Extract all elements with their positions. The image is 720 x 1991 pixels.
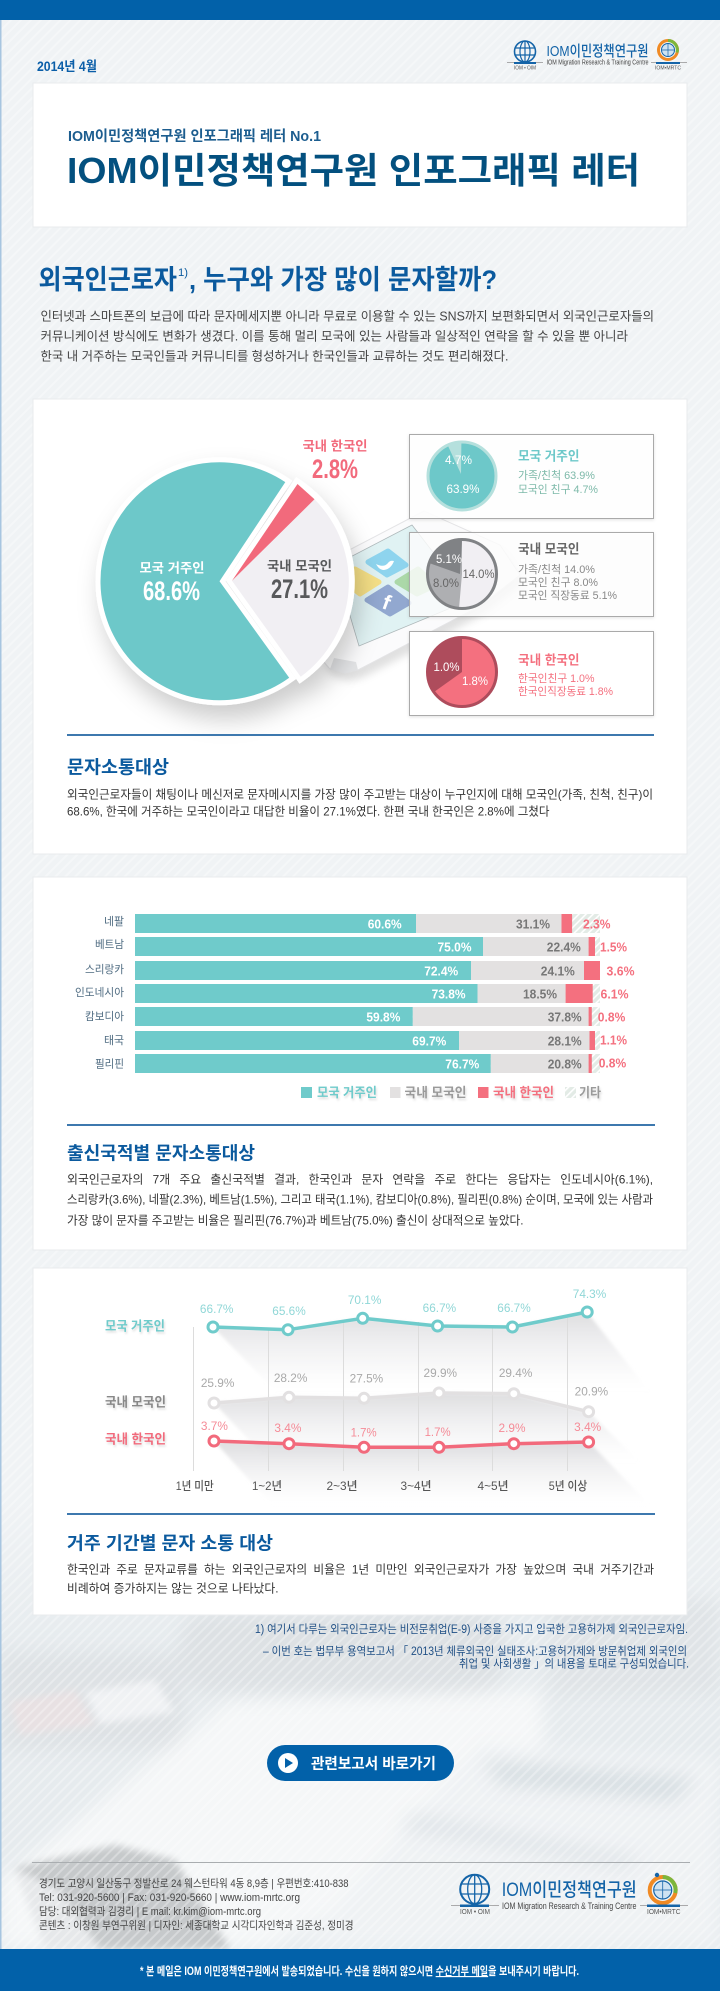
row: Thailand: 69.7% xyxy=(412,1034,446,1048)
series: Koreans: 1.7% xyxy=(351,1428,377,1440)
series: Koreans: 3.4% xyxy=(574,1422,601,1434)
box: compatriots in Korea: 가족/친척 14.0% xyxy=(518,563,595,576)
box: home country residents xyxy=(410,434,654,518)
series: Koreans: 3.7% xyxy=(201,1421,228,1433)
text: by nationality: 외국인근로자의 7개 주요 출신국적별 결과, 한국인과 문자 연락을 주로 한다는 응답자는 인도네시아(6.1%), xyxy=(67,1172,653,1186)
box: Koreans xyxy=(410,632,654,716)
series: compatriots in Korea: 29.4% xyxy=(499,1368,532,1380)
x axis labels: 3~4년 xyxy=(400,1479,432,1493)
series: Koreans xyxy=(201,1421,601,1452)
line chart xyxy=(105,1289,650,1505)
row: Nepal: 2.3% xyxy=(583,917,610,931)
box: home country residents: 가족/친척 63.9% xyxy=(518,469,595,482)
small pie xyxy=(428,638,496,706)
row: Nepal: 네팔 xyxy=(104,915,124,928)
row: Indonesia: 인도네시아 xyxy=(75,986,124,999)
slice: compatriots in Korea xyxy=(232,499,349,677)
row: Nepal: 31.1% xyxy=(516,917,550,931)
contact details: 담당: 대외협력과 김경리 | E mail: kr.kim@iom-mrtc.org xyxy=(39,1905,261,1918)
row: Nepal xyxy=(104,914,610,933)
contact details xyxy=(39,1876,354,1932)
series: home country residents: 66.7% xyxy=(497,1303,531,1315)
series: home country residents: 70.1% xyxy=(348,1295,381,1307)
text: by nationality xyxy=(67,1172,653,1228)
box: home country residents: 모국인 친구 4.7% xyxy=(518,483,598,496)
footer bar: * 본 메일은 IOM 이민정책연구원에서 발송되었습니다. 수신을 원하지 않으시면 수신거부 메일을 보내주시기 바랍니다. xyxy=(140,1964,579,1978)
date: 2014년 4월 xyxy=(37,58,97,74)
pie chart: main: 국내 모국인 xyxy=(267,558,332,574)
row: Sri Lanka: 24.1% xyxy=(541,964,575,978)
row: Indonesia: 18.5% xyxy=(523,987,557,1001)
row: Sri Lanka xyxy=(85,961,634,980)
footnotes: 취업 및 사회생활 」의 내용을 토대로 구성되었습니다. xyxy=(459,1656,689,1670)
text: by length of stay: 한국인과 주로 문자교류를 하는 외국인근로자의 비율은 1년 미만인 외국인근로자가 가장 높았으며 국내 거주기간과 xyxy=(67,1562,654,1576)
heading: main question: , 누구와 가장 많이 문자할까? xyxy=(189,265,497,295)
series labels: 국내 모국인 xyxy=(105,1394,166,1410)
box: home country residents: 모국 거주인 xyxy=(518,448,580,464)
row: Philippines: 76.7% xyxy=(445,1057,479,1071)
box: Koreans: 국내 한국인 xyxy=(518,652,580,668)
small pie: 1.8% xyxy=(462,674,488,688)
logo: IOM footer: IOM Migration Research & Training Centre xyxy=(502,1901,636,1912)
icon: smartphone: f xyxy=(379,591,395,615)
contact details: Tel: 031-920-5600 | Fax: 031-920-5660 | www.iom-mrtc.org xyxy=(39,1892,300,1904)
box: Koreans: 한국인직장동료 1.8% xyxy=(518,685,613,698)
series: home country residents: 66.7% xyxy=(200,1304,233,1316)
legend xyxy=(301,1085,601,1100)
background photo: blurred report and keyboard xyxy=(0,1600,720,1949)
button: related report: 관련보고서 바로가기 xyxy=(311,1756,436,1772)
row: Vietnam: 1.5% xyxy=(600,940,627,954)
series: compatriots in Korea xyxy=(201,1368,608,1417)
logo: IOM header: IOM • OIM xyxy=(514,66,536,72)
small pie xyxy=(428,539,496,609)
series: Koreans: 3.4% xyxy=(274,1423,301,1435)
heading: main question xyxy=(38,265,497,295)
intro text: 커뮤니케이션 방식에도 변화가 생겼다. 이를 통해 멀리 모국에 있는 사람들과 일상적인 연락을 할 수 있을 뿐 아니라 xyxy=(40,330,628,344)
logo: IOM footer: IOM이민정책연구원 xyxy=(502,1879,637,1901)
row: Sri Lanka: 3.6% xyxy=(606,964,634,978)
series: compatriots in Korea: 25.9% xyxy=(201,1378,234,1390)
box: compatriots in Korea: 모국인 친구 8.0% xyxy=(518,576,598,589)
heading: main question: 1) xyxy=(178,267,188,279)
pie chart: main: 2.8% xyxy=(312,454,358,484)
row: Vietnam xyxy=(95,937,627,956)
row: Cambodia: 59.8% xyxy=(366,1010,400,1024)
panel: communication targets xyxy=(33,399,687,854)
intro text: 인터넷과 스마트폰의 보급에 따라 문자메세지뿐 아니라 무료로 이용할 수 있는 SNS까지 보편화되면서 외국인근로자들의 xyxy=(40,310,654,324)
icon: play xyxy=(278,1753,298,1773)
text: communication targets xyxy=(67,788,653,818)
series: compatriots in Korea: 27.5% xyxy=(350,1374,383,1386)
row: Vietnam: 22.4% xyxy=(547,940,581,954)
row: Philippines: 0.8% xyxy=(599,1056,626,1070)
small pie: 8.0% xyxy=(433,576,459,590)
row: Philippines xyxy=(95,1054,626,1073)
x axis labels: 4~5년 xyxy=(478,1479,508,1493)
logo: IOM header: IOM Migration Research & Training Centre xyxy=(546,60,649,66)
logo: IOM header: IOM•MRTC xyxy=(655,66,681,72)
footnotes xyxy=(255,1623,689,1670)
icon: smartphone xyxy=(322,511,524,681)
subtitle: IOM이민정책연구원 인포그래픽 레터 No.1 xyxy=(68,128,321,145)
footer bar xyxy=(0,1949,720,1991)
left edge line xyxy=(0,20,2,1949)
small pie xyxy=(428,442,496,510)
row: Cambodia: 캄보디아 xyxy=(85,1010,124,1023)
box: compatriots in Korea xyxy=(410,532,654,616)
series: compatriots in Korea: 29.9% xyxy=(424,1368,457,1380)
pie chart: main xyxy=(100,438,367,700)
heading: communication targets: 문자소통대상 xyxy=(67,758,169,778)
legend: 국내 한국인 xyxy=(493,1085,554,1100)
box: Koreans: 한국인친구 1.0% xyxy=(518,672,595,685)
row: Philippines: 20.8% xyxy=(548,1057,582,1071)
pie chart: main: 27.1% xyxy=(271,574,328,604)
series: Koreans: 1.7% xyxy=(425,1427,451,1439)
panel: by nationality xyxy=(33,877,687,1250)
x axis labels: 5년 이상 xyxy=(549,1479,587,1493)
text: communication targets: 68.6%, 한국에 거주하는 모국인이라고 대답한 비율이 27.1%였다. 한편 국내 한국인은 2.8%에 그쳤다 xyxy=(67,804,550,818)
row: Vietnam: 75.0% xyxy=(438,940,472,954)
series labels xyxy=(105,1318,166,1446)
series: compatriots in Korea: 20.9% xyxy=(575,1386,608,1398)
logo: IOM header xyxy=(507,40,687,72)
slice: home country residents xyxy=(100,462,289,700)
row: Thailand: 태국 xyxy=(104,1034,124,1047)
x axis labels: 2~3년 xyxy=(326,1479,358,1493)
pie chart: main: 모국 거주인 xyxy=(140,560,204,576)
text: by length of stay xyxy=(67,1562,654,1596)
heading: by length of stay: 거주 기간별 문자 소통 대상 xyxy=(67,1534,273,1554)
logo: IOM header: IOM이민정책연구원 xyxy=(546,43,648,60)
row: Indonesia xyxy=(75,984,628,1003)
contact details: 경기도 고양시 일산동구 정발산로 24 웨스턴타워 4동 8,9층 | 우편번호:410-838 xyxy=(39,1876,348,1890)
series: compatriots in Korea: 28.2% xyxy=(274,1373,307,1385)
row: Cambodia: 0.8% xyxy=(598,1010,625,1024)
series: home country residents xyxy=(200,1289,606,1335)
stacked bar chart xyxy=(75,914,634,1073)
text: by nationality: 스리랑카(3.6%), 네팔(2.3%), 베트남(1.5%), 그리고 태국(1.1%), 캄보디아(0.8%), 필리핀(0.8%) 순이며, 모국에 있는 사람과 xyxy=(67,1192,653,1206)
text: communication targets: 외국인근로자들이 채팅이나 메신저로 문자메시지를 가장 많이 주고받는 대상이 누구인지에 대해 모국인(가족, 친척, 친구)이 xyxy=(67,788,653,802)
series labels: 모국 거주인 xyxy=(105,1318,165,1334)
logo: IOM footer: IOM•MRTC xyxy=(647,1909,680,1916)
row: Indonesia: 6.1% xyxy=(600,987,628,1001)
logo: IOM footer xyxy=(451,1873,688,1916)
button: related report xyxy=(267,1745,454,1781)
row: Thailand: 1.1% xyxy=(600,1034,627,1048)
row: Cambodia: 37.8% xyxy=(548,1010,582,1024)
series: home country residents: 74.3% xyxy=(573,1289,606,1301)
pie chart: main: 68.6% xyxy=(143,576,200,606)
panel: title xyxy=(33,83,687,227)
heading: by nationality: 출신국적별 문자소통대상 xyxy=(67,1144,255,1164)
series labels: 국내 한국인 xyxy=(105,1432,166,1446)
legend: 모국 거주인 xyxy=(317,1085,377,1100)
box: compatriots in Korea: 모국인 직장동료 5.1% xyxy=(518,589,617,602)
footnotes: – 이번 호는 법무부 용역보고서 「 2013년 체류외국인 실태조사:고용허가제와 방문취업제 외국인의 xyxy=(263,1645,687,1658)
row: Nepal: 60.6% xyxy=(368,917,402,931)
intro text xyxy=(40,310,654,364)
row: Sri Lanka: 스리랑카 xyxy=(85,963,124,976)
small pie: 63.9% xyxy=(446,482,480,496)
contact details: 콘텐츠 : 이창원 부연구위원 | 디자인: 세종대학교 시각디자인학과 김준성, 정미경 xyxy=(39,1919,354,1932)
box: compatriots in Korea: 국내 모국인 xyxy=(518,542,580,556)
icon: IOM globe xyxy=(514,41,536,62)
small pie: 1.0% xyxy=(434,660,460,674)
icon: IOM globe xyxy=(460,1875,489,1904)
legend: 국내 모국인 xyxy=(404,1085,466,1100)
top bar xyxy=(0,0,720,20)
icon: MRTC globe xyxy=(658,40,678,60)
pie chart: main: 국내 한국인 xyxy=(302,438,368,454)
series: home country residents: 65.6% xyxy=(272,1306,306,1318)
row: Philippines: 필리핀 xyxy=(95,1058,124,1070)
legend: 기타 xyxy=(579,1085,601,1100)
series: home country residents: 66.7% xyxy=(423,1303,456,1315)
series: Koreans: 2.9% xyxy=(498,1423,526,1435)
row: Indonesia: 73.8% xyxy=(432,987,466,1001)
text: by length of stay: 비례하여 증가하지는 않는 것으로 나타났다. xyxy=(67,1582,278,1596)
intro text: 한국 내 거주하는 모국인들과 커뮤니티를 형성하거나 한국인들과 교류하는 것도 편리해졌다. xyxy=(40,350,508,364)
x axis labels: 1년 미만 xyxy=(176,1479,214,1493)
panel: by length of stay xyxy=(33,1268,687,1615)
small pie: 14.0% xyxy=(462,567,495,581)
x axis labels: 1~2년 xyxy=(252,1479,282,1493)
row: Sri Lanka: 72.4% xyxy=(424,964,458,978)
row: Thailand xyxy=(104,1031,627,1050)
logo: IOM footer: IOM • OIM xyxy=(460,1909,490,1916)
slice: Koreans xyxy=(232,484,314,581)
row: Vietnam: 베트남 xyxy=(95,938,124,951)
title: IOM이민정책연구원 인포그래픽 레터 xyxy=(67,150,640,191)
small pie: 5.1% xyxy=(436,552,462,566)
row: Cambodia xyxy=(85,1007,625,1026)
small pie: 4.7% xyxy=(445,453,472,467)
row: Thailand: 28.1% xyxy=(548,1034,582,1048)
icon: MRTC globe xyxy=(650,1873,676,1903)
text: by nationality: 가장 많이 문자를 주고받는 비율은 필리핀(76.7%)과 베트남(75.0%) 출신이 상대적으로 높았다. xyxy=(67,1214,524,1228)
heading: main question: 외국인근로자 xyxy=(38,265,177,295)
x axis labels xyxy=(176,1479,587,1493)
